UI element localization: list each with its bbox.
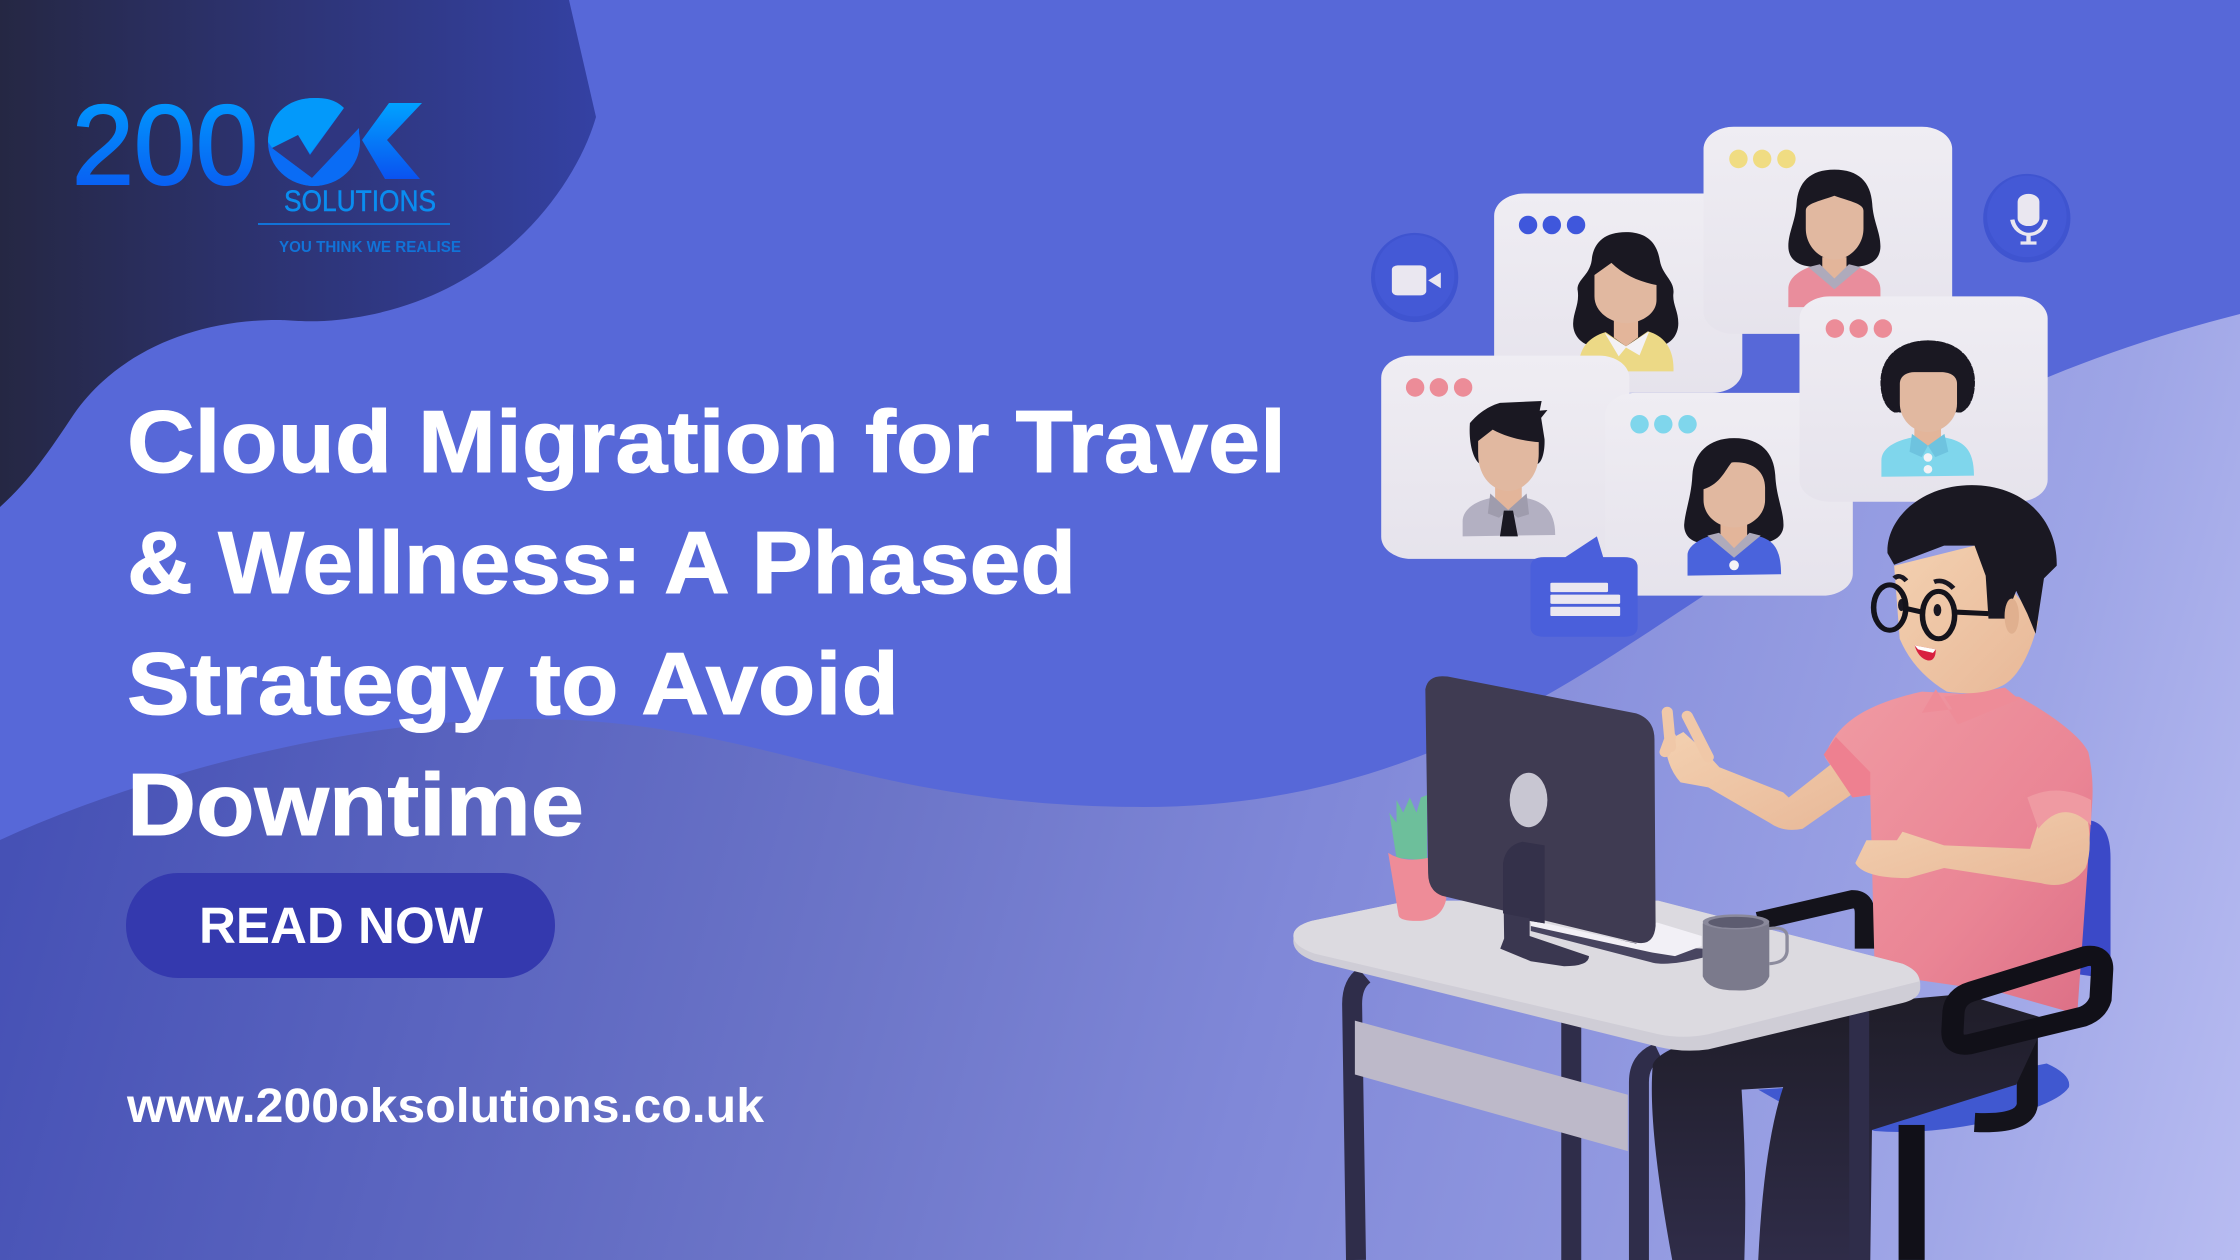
title: Downtime (127, 755, 584, 854)
icon: microphone (1983, 174, 2070, 262)
chair armrest (1952, 956, 2102, 1045)
card: woman in yellow (1494, 194, 1742, 393)
website url: www.200oksolutions.co.uk (126, 1080, 764, 1133)
icon: video camera (1371, 233, 1458, 322)
button: read now (126, 873, 555, 978)
title (127, 392, 1286, 854)
card: woman in pink (1704, 127, 1952, 334)
button: read now: READ NOW (199, 897, 484, 954)
card: man in cyan (1799, 296, 2048, 502)
background wave (0, 314, 2240, 1260)
logo underline (258, 223, 450, 225)
arm: resting (1855, 806, 2090, 885)
person legs (1652, 994, 2047, 1260)
card: man with tie (1381, 356, 1629, 559)
dark corner blob (0, 0, 596, 507)
video call cards (1371, 127, 2070, 637)
monitor (1425, 676, 1656, 943)
mug (1703, 914, 1787, 990)
sleeve (1824, 737, 1870, 797)
icon: chat bubble (1530, 536, 1638, 637)
sleeve right (2027, 790, 2091, 829)
logo wordmark: SOLUTIONS (284, 185, 436, 218)
desk front right leg (1841, 1012, 1877, 1260)
logo (72, 82, 461, 256)
logo K (362, 103, 422, 179)
card: woman in blue (1605, 393, 1853, 596)
person torso (1825, 692, 2093, 1014)
glasses (1874, 585, 1988, 639)
monitor stand (1500, 842, 1589, 966)
title: Cloud Migration for Travel (127, 392, 1286, 491)
logo tagline: YOU THINK WE REALISE (279, 239, 461, 256)
person at desk (1293, 485, 2111, 1260)
desk panel (1355, 1021, 1628, 1151)
keyboard (1531, 920, 1703, 964)
chair (1758, 820, 2111, 1260)
desk legs (1352, 975, 1658, 1260)
desk top (1293, 901, 1920, 1051)
plant (1388, 795, 1446, 921)
collar (1922, 688, 2019, 724)
head (1874, 485, 2057, 693)
arm: gesturing (1665, 712, 1858, 830)
logo number 200: 200 (72, 82, 258, 208)
logo check circle (268, 98, 360, 186)
title: Strategy to Avoid (127, 634, 899, 733)
title: & Wellness: A Phased (127, 513, 1076, 612)
